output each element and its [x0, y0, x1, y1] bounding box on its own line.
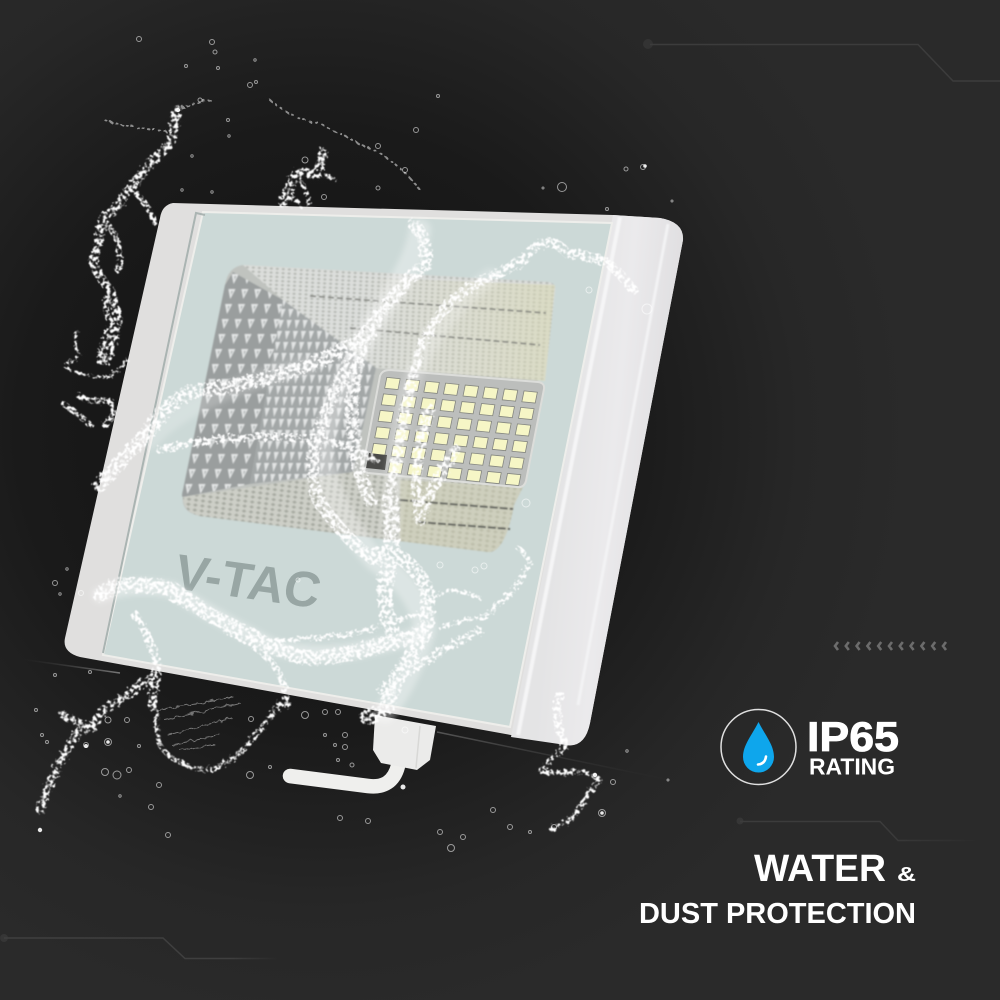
- reflector base: [183, 265, 555, 552]
- reflector bottom warm tint: [400, 480, 523, 552]
- reflector band shadows: [310, 296, 546, 345]
- heading: RATING: RATING: [809, 754, 895, 780]
- solid water droplets: [38, 108, 647, 832]
- circuit line: top right: [643, 39, 1000, 81]
- heading: DUST PROTECTION: DUST PROTECTION: [639, 898, 916, 930]
- lower wave: [100, 584, 430, 707]
- water trails: upper arcs: [105, 100, 420, 190]
- cable gland and cable: [290, 715, 436, 786]
- water splash: upper left: [65, 110, 335, 425]
- reflector inner left facet: [250, 300, 376, 484]
- reflector bottom shadows: [400, 500, 513, 529]
- floodlight: [65, 203, 683, 786]
- water droplets: [34, 36, 673, 852]
- logo: V-TAC: V-TAC: [170, 544, 326, 619]
- LED board: [363, 370, 544, 487]
- lamp body: [65, 203, 683, 745]
- right side panel: [511, 215, 683, 745]
- water haze over lamp: [100, 230, 490, 712]
- LED chip array: [368, 377, 537, 486]
- glass front: [103, 212, 612, 727]
- water splash: lower left: [40, 677, 280, 810]
- heading: WATER: WATER: [754, 848, 886, 890]
- right arm: [380, 547, 565, 745]
- icon: water drop in circle: [721, 710, 796, 784]
- circuit line: bottom left: [0, 934, 278, 958]
- water fan strands: [157, 697, 240, 750]
- water splash: lower right spray: [540, 747, 600, 829]
- circuit line: lower right: [736, 818, 975, 840]
- left arm across lamp: [100, 335, 375, 485]
- reflector: [182, 265, 555, 552]
- water splash over lamp: [100, 225, 633, 745]
- central column: [313, 225, 633, 717]
- glass inner bevel: [103, 213, 205, 653]
- reflector bottom facet: [183, 472, 523, 552]
- reflector top facet warm tint: [300, 275, 555, 381]
- ampersand: &: [897, 864, 916, 886]
- reflector left facet: [182, 272, 283, 497]
- chevron row: [835, 642, 946, 650]
- reflector top facet: [243, 265, 555, 381]
- sensor patch: [366, 453, 387, 470]
- floor reflection lines: [20, 659, 670, 780]
- heading: IP65: IP65: [807, 713, 899, 760]
- side panel creases: [518, 217, 668, 735]
